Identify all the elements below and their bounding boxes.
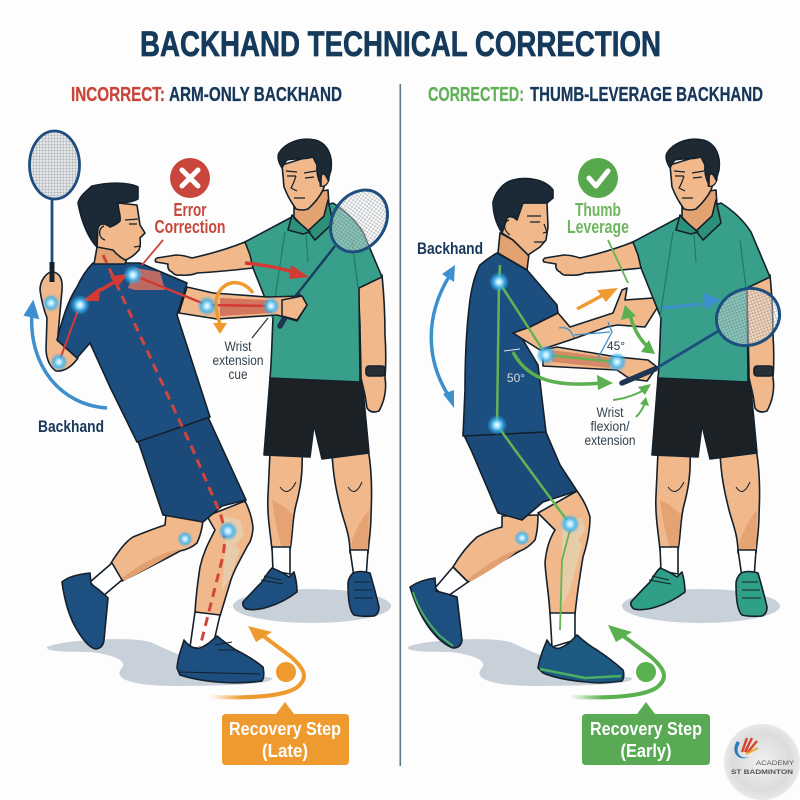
- coach neck: [682, 190, 718, 232]
- angle labels: 50°: [507, 371, 525, 385]
- wrist rotation arrow: [213, 283, 253, 334]
- red double arrow shoulder: [82, 274, 128, 301]
- coach pointing arm: [155, 242, 253, 275]
- front shoe: [538, 635, 624, 683]
- front leg: [195, 501, 253, 616]
- front shoe: [177, 636, 264, 683]
- shoulder muscle: [128, 268, 165, 290]
- coach features: [286, 171, 316, 198]
- ground shadows left: [47, 589, 391, 686]
- back leg: [453, 515, 538, 582]
- icon: error cross: [170, 158, 210, 198]
- angle labels: 45°: [607, 339, 625, 353]
- right heading: CORRECTED:: [428, 84, 524, 106]
- player left: [40, 183, 307, 683]
- front sock: [190, 612, 220, 650]
- coach hair: [278, 139, 331, 185]
- back shoe trim: [413, 592, 453, 646]
- joint markers left: [42, 265, 280, 547]
- hair: [493, 178, 553, 233]
- coach pointing arm: [543, 242, 641, 275]
- backhand label right: Backhand: [417, 239, 483, 258]
- forearm muscles: [552, 350, 612, 368]
- coach racket left: [298, 179, 399, 293]
- error correction label: Error: [174, 200, 206, 220]
- ear and features: [100, 219, 141, 247]
- wrist flexion label: [584, 404, 636, 448]
- angle markers white: [504, 349, 550, 380]
- backhand label left: Backhand: [38, 417, 104, 436]
- right heading: [428, 84, 763, 106]
- title: BACKHAND TECHNICAL CORRECTION: [140, 25, 661, 64]
- racket grip right: [622, 369, 655, 383]
- coach left: [155, 139, 386, 616]
- anatomy lines left: [59, 255, 271, 647]
- blue arrow to racket: [662, 293, 721, 310]
- coach face: [670, 155, 717, 210]
- blue arc arrow left: [25, 302, 107, 408]
- shorts: [137, 415, 246, 522]
- academy logo: ST BADMINTON: [731, 769, 793, 776]
- error correction label: [154, 200, 226, 237]
- wrist extension label: Wrist: [224, 338, 252, 354]
- coach right arm: [746, 275, 774, 412]
- back sock: [435, 567, 468, 598]
- coach hair: [666, 139, 719, 185]
- recovery callout late: (Late): [262, 740, 308, 761]
- polo sleeve and placket: [660, 232, 746, 318]
- raised arm: [40, 272, 78, 371]
- forearm extended: [179, 287, 307, 321]
- coach ear: [708, 171, 717, 186]
- coach legs: [656, 449, 760, 553]
- wrist cue pointer: [252, 318, 268, 338]
- face: [97, 203, 145, 260]
- coach right: [543, 139, 774, 616]
- green curved arrow: [513, 352, 613, 390]
- back sock: [90, 563, 122, 596]
- left heading: [71, 84, 342, 106]
- jersey: [57, 263, 210, 442]
- neck: [94, 247, 128, 264]
- left heading: ARM-ONLY BACKHAND: [169, 84, 342, 106]
- coach shorts: [652, 378, 757, 459]
- recovery callout early: Recovery Step: [590, 718, 702, 739]
- knee bones: [560, 518, 585, 610]
- coach legs: [268, 449, 372, 553]
- raised forearm with open hand: [513, 288, 657, 350]
- academy logo: [724, 724, 800, 800]
- wrist flexion label: flexion/: [590, 418, 630, 434]
- polo collar: [288, 200, 333, 240]
- thin blue angle markers: [559, 322, 612, 358]
- orange arrow thumb: [577, 288, 618, 309]
- player right: [410, 178, 657, 683]
- thumb leverage label: [567, 200, 629, 237]
- back shoe: [410, 578, 462, 648]
- front shoe trim: [540, 669, 621, 678]
- recovery callout late: Recovery Step: [229, 718, 341, 739]
- face: [502, 203, 548, 255]
- lower forearm: [543, 347, 657, 381]
- left heading: INCORRECT:: [71, 84, 165, 106]
- coach polo: [243, 203, 382, 382]
- front shoe laces: [180, 642, 260, 674]
- coach socks and shoes: [631, 547, 767, 616]
- back leg shade: [468, 549, 520, 582]
- coach polo: [631, 203, 770, 382]
- recovery callout early: [582, 702, 710, 765]
- watch: [366, 366, 385, 376]
- recovery callout late: [222, 702, 349, 765]
- recovery arrow late: [210, 626, 304, 697]
- blue double arrow right: [431, 265, 455, 408]
- error correction label: Correction: [154, 217, 226, 237]
- coach shorts: [264, 378, 369, 459]
- ground shadows right: [408, 589, 780, 686]
- angle labels: [507, 339, 625, 385]
- front leg: [538, 491, 590, 614]
- wrist extension label: [212, 338, 264, 382]
- hair: [78, 183, 138, 247]
- wrist extension label: cue: [228, 366, 248, 382]
- front sock: [550, 613, 575, 647]
- ear and features: [505, 216, 547, 242]
- neck: [498, 233, 529, 270]
- thumb leverage label: Leverage: [567, 217, 629, 237]
- thumb leverage label: Thumb: [575, 200, 621, 220]
- watch: [754, 366, 773, 376]
- wrist extension label: extension: [212, 352, 264, 368]
- coach direction arrow red: [245, 263, 309, 279]
- small wrist arrows: [613, 384, 651, 417]
- recovery callout early: (Early): [620, 740, 672, 761]
- thumb pointer line: [608, 240, 628, 283]
- forearm muscles: [220, 298, 272, 316]
- jersey: [463, 253, 558, 436]
- back leg shade: [122, 549, 180, 581]
- wrist flexion label: Wrist: [596, 404, 624, 420]
- shorts: [463, 430, 577, 520]
- academy logo: ACADEMY: [756, 760, 795, 767]
- coach features: [674, 171, 704, 198]
- coach socks and shoes: [243, 547, 379, 616]
- back leg: [111, 515, 203, 581]
- skeleton lines right: [497, 265, 617, 630]
- coach right arm: [358, 275, 386, 412]
- racket left player: [30, 131, 80, 282]
- player grip on racket: [280, 295, 307, 326]
- joint markers right: [487, 272, 627, 546]
- coach neck: [294, 190, 330, 232]
- error pointer line: [142, 240, 163, 265]
- recovery arrow early: [570, 625, 664, 697]
- polo sleeve and placket: [272, 232, 358, 318]
- knee bones: [222, 516, 244, 590]
- coach ear: [320, 171, 329, 186]
- coach face: [282, 155, 329, 210]
- divider: [400, 84, 401, 766]
- back shoe: [62, 573, 108, 649]
- polo collar: [676, 200, 721, 240]
- icon: correct check: [578, 158, 618, 198]
- wrist flexion label: extension: [584, 432, 636, 448]
- green double arrow: [621, 305, 655, 354]
- racket head right: [655, 280, 788, 369]
